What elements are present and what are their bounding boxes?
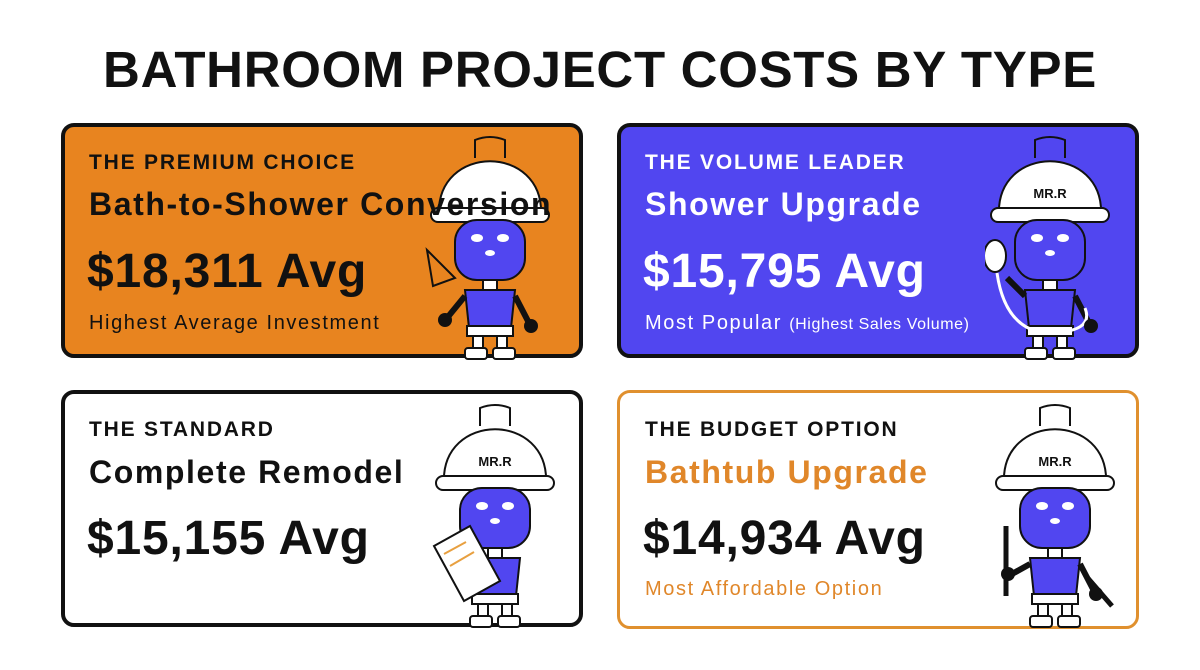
price: $15,155 Avg xyxy=(87,512,370,565)
icon: robot 1 xyxy=(426,136,550,360)
price: $14,934 Avg xyxy=(643,512,926,565)
heading: Bathtub Upgrade xyxy=(645,454,929,490)
price: $18,311 Avg xyxy=(87,245,367,298)
label: THE BUDGET OPTION xyxy=(645,418,898,441)
label: THE PREMIUM CHOICE xyxy=(89,151,356,174)
subtitle: Highest Average Investment xyxy=(89,312,380,334)
icon: robot 4 xyxy=(995,404,1115,628)
icon: robot 3 xyxy=(432,404,555,628)
panel: volume leader xyxy=(617,123,1139,358)
icon: robot 2: MR.R xyxy=(1033,186,1067,201)
panel: premium choice xyxy=(61,123,583,358)
heading: Complete Remodel xyxy=(89,454,404,490)
panel: standard xyxy=(61,390,583,627)
icon: robot 3: MR.R xyxy=(478,454,512,469)
title: BATHROOM PROJECT COSTS BY TYPE xyxy=(103,41,1097,98)
label: THE VOLUME LEADER xyxy=(645,151,905,174)
subtitle: Most Popular (Highest Sales Volume) xyxy=(645,312,970,334)
panel: budget option xyxy=(617,390,1139,629)
heading: Bath-to-Shower Conversion xyxy=(89,186,552,222)
icon: robot 4: MR.R xyxy=(1038,454,1072,469)
price: $15,795 Avg xyxy=(643,245,926,298)
heading: Shower Upgrade xyxy=(645,186,922,222)
icon: robot 2 xyxy=(985,136,1110,360)
label: THE STANDARD xyxy=(89,418,275,441)
subtitle: Most Affordable Option xyxy=(645,578,883,600)
